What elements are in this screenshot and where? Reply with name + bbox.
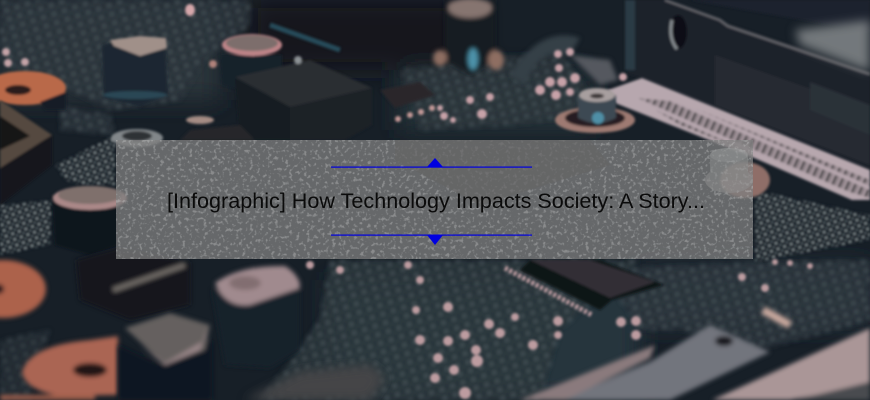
standoff seen through band xyxy=(705,148,753,193)
metal frame, top right xyxy=(628,0,870,170)
orange washer, upper left xyxy=(0,71,66,110)
label strip with barcode xyxy=(608,78,870,200)
panel: translucent title band xyxy=(116,140,753,259)
pink solder cluster xyxy=(437,48,627,123)
fine sharp circuitry at mid left and right xyxy=(55,135,115,185)
blurred pale part, top right corner xyxy=(795,20,870,72)
right-side washer xyxy=(720,162,770,198)
title: [Infographic] How Technology Impacts Society: A Story... xyxy=(167,189,705,213)
brown chip, left edge xyxy=(0,100,52,205)
dark chip with light stripe xyxy=(76,248,190,320)
cylinder and blue reflection, top middle xyxy=(433,0,618,85)
copper washers, lower left xyxy=(0,260,118,400)
blurred grey part, bottom xyxy=(245,365,385,400)
lower IC chip with pins xyxy=(505,260,664,315)
smooth chip area in band xyxy=(395,140,610,205)
capacitors and chips, upper left xyxy=(2,4,435,140)
circuitry speckle seen through band xyxy=(116,140,753,259)
bottom divider with downward triangle xyxy=(331,234,532,245)
capacitor, lower left xyxy=(118,313,212,400)
capacitor, mid left xyxy=(52,186,127,255)
top divider with upward triangle xyxy=(331,158,532,168)
standoff nut xyxy=(555,88,635,133)
pink solder dots, lower right xyxy=(306,259,813,399)
capacitor, lower center xyxy=(212,266,300,368)
grey metal slab and bottom strip xyxy=(520,310,870,400)
screw post xyxy=(111,129,163,147)
